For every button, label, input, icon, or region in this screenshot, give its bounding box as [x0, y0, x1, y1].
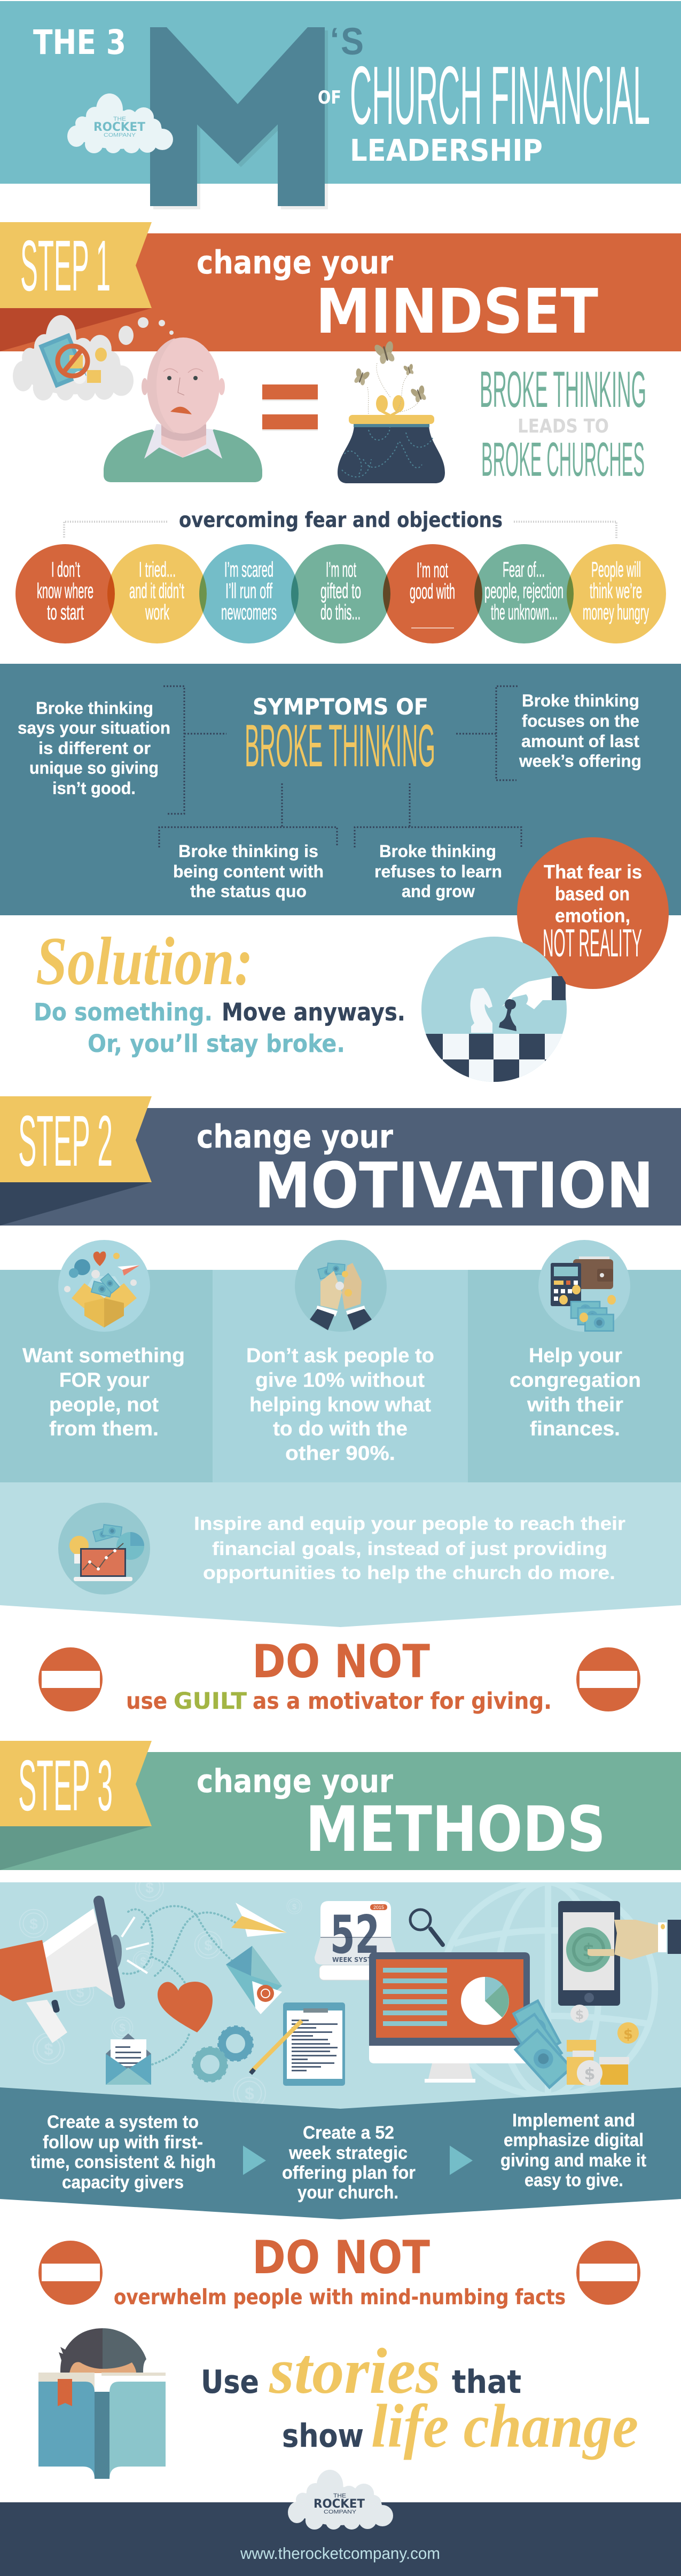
text: want something for your people: Want something [22, 1345, 185, 1367]
panel: inspire and equip [0, 1482, 681, 1627]
icon: cash and coins: $ [623, 2027, 633, 2043]
symptom: different or unique: is different or [38, 739, 151, 758]
title: apostrophe s: S [341, 21, 364, 63]
objection: not good with blank [410, 559, 455, 629]
objection: tried: work [145, 601, 170, 624]
objection: not gifted [320, 558, 361, 624]
logo: rocket company cloud [288, 2470, 393, 2530]
symptom: status quo: being content with [173, 862, 324, 881]
objection: fear of: people, rejection [484, 579, 563, 603]
text: follow up system [30, 2112, 216, 2193]
text: digital giving: easy to give. [525, 2170, 623, 2190]
text: use stories that show life change [201, 2335, 638, 2460]
callout: do not overwhelm [38, 2231, 640, 2310]
big letter M [150, 27, 328, 209]
text: follow up system: Create a system to [47, 2112, 199, 2132]
step 3 flag: STEP 3 [18, 1745, 113, 1826]
icon: man with worried face [104, 337, 262, 482]
objection: where to start: I don’t [51, 558, 80, 582]
icon: mail envelope [226, 1946, 282, 2014]
text: follow up system: follow up with first- [43, 2132, 203, 2153]
solution line one: Do something. [34, 998, 213, 1026]
text: inspire and equip: financial goals, instead of just providing [212, 1538, 607, 1559]
objection: tried [129, 558, 184, 624]
logo: rocket company cloud: ROCKET [93, 121, 145, 134]
text: digital giving [500, 2110, 646, 2190]
objection: fear of: Fear of... [503, 558, 545, 582]
text: inspire and equip: opportunities to help the church do more. [203, 1562, 615, 1583]
objection: not gifted: do this... [320, 601, 361, 624]
objection: fear of: the unknown... [491, 601, 558, 624]
text: 52 week plan: offering plan for [282, 2163, 416, 2183]
icon: 52 week calendar: WEEK SYSTEM [332, 1956, 382, 1964]
solution line one [34, 998, 405, 1026]
panel: symptoms of broke thinking [0, 664, 681, 915]
logo: rocket company cloud: ROCKET [314, 2498, 365, 2511]
callout: do not use guilt [38, 1635, 640, 1715]
objection: fear of [484, 558, 563, 624]
icon: 52 week calendar: 2015 [373, 1905, 384, 1910]
chart: overlapping objection circles: good with [410, 580, 455, 603]
objection: newcomers [221, 558, 277, 624]
text: broke thinking leads to broke churches [480, 361, 646, 486]
title: of: OF [318, 87, 341, 108]
arrow: two [450, 2146, 473, 2175]
heading: symptoms of: SYMPTOMS OF [253, 694, 428, 720]
text: help your congregation: finances. [530, 1418, 620, 1440]
text: use stories that show life change: show [282, 2417, 364, 2455]
icon: phone with hand [558, 1901, 681, 2006]
arrow: one [243, 2146, 266, 2175]
text: 52 week plan: week strategic [288, 2143, 408, 2163]
text: inspire and equip: Inspire and equip your people to reach their [194, 1513, 625, 1534]
background globe [441, 1882, 655, 2096]
guilt sentence [126, 1688, 552, 1715]
objection: newcomers: I’m scared [224, 558, 273, 582]
step 2 flag [0, 1096, 152, 1182]
icon: chess move [421, 937, 567, 1082]
icon: wallet and calculator [538, 1240, 630, 1332]
panel: header [0, 1, 681, 209]
icon: person reading book [38, 2328, 166, 2479]
text: inspire and equip [194, 1513, 625, 1583]
step 1 flag [0, 222, 152, 308]
symptom: last week's offering [519, 691, 641, 771]
icon: gears [193, 2027, 252, 2081]
text: 52 week plan: your church. [298, 2182, 398, 2203]
guilt sentence: as a motivator for giving. [253, 1688, 552, 1715]
symptom: different or unique: says your situation [18, 718, 170, 737]
title: apostrophe s [330, 21, 364, 63]
logo: rocket company cloud: COMPANY [104, 132, 136, 138]
panel: step 3 banner [0, 1741, 681, 1870]
symptom: different or unique: Broke thinking [36, 698, 153, 718]
icon: cash and coins [510, 1999, 639, 2090]
icon: magnifying glass [410, 1910, 443, 1945]
icon: computer monitor with report [369, 1952, 530, 2083]
heading: mindset: MINDSET [316, 276, 598, 348]
icon: hands with money [295, 1240, 387, 1332]
text: don't ask people to give 10%: give 10% without [255, 1369, 425, 1392]
icon: 52 week calendar [315, 1901, 397, 1980]
icon: cash and coins: $ [575, 2007, 584, 2022]
icon: equals sign [262, 384, 318, 431]
step 1 flag: STEP 1 [20, 225, 111, 306]
text: use stories that show life change: Use [201, 2363, 259, 2401]
objection: tried: and it didn’t [129, 579, 184, 603]
text: want something for your people: from them. [49, 1418, 159, 1440]
chart: overlapping objection circles: know where [37, 579, 93, 603]
objection: not good with blank: I’m not [417, 559, 448, 582]
symptom: refuses to learn: Broke thinking [379, 842, 496, 861]
icon: phone with hand: $ [582, 1940, 595, 1961]
text: don't ask people to give 10%: helping know what [249, 1394, 431, 1416]
text: don't ask people to give 10% [246, 1345, 434, 1465]
do not heading: DO NOT [252, 1635, 430, 1688]
objection: where to start: to start [47, 601, 84, 624]
symptom: status quo [173, 842, 324, 901]
do not heading: DO NOT [252, 2231, 430, 2284]
heading: change your: change your [197, 1763, 393, 1800]
overwhelm sentence: overwhelm people with mind-numbing facts [114, 2286, 566, 2310]
guilt sentence: use [126, 1688, 167, 1715]
icon: thought cloud with crossed out money [13, 315, 174, 400]
objection: where to start [37, 558, 93, 624]
panel: methods steps [0, 2087, 681, 2219]
callout: fear based on emotion: emotion, [555, 905, 630, 926]
icon: small envelope with letter [106, 2033, 151, 2085]
text: use stories that show life change: stories [269, 2335, 441, 2407]
icon: 52 week calendar: 52 [330, 1905, 380, 1966]
heading: change your: change your [197, 1118, 393, 1156]
logo: rocket company cloud: COMPANY [324, 2509, 356, 2515]
website url: www.therocketcompany.com [240, 2544, 440, 2563]
icon: paper plane [231, 1903, 287, 1937]
icon: cash and coins: $ [584, 2065, 595, 2084]
symptom: last week's offering: week’s offering [519, 751, 641, 771]
text: help your congregation: congregation [510, 1369, 641, 1392]
text: don't ask people to give 10%: to do with the [273, 1418, 408, 1440]
text: help your congregation: Help your [529, 1345, 622, 1367]
text: digital giving: Implement and [512, 2110, 635, 2131]
objection: tried: I tried... [139, 558, 176, 582]
objection: money hungry [583, 558, 649, 624]
symptom: last week's offering: Broke thinking [522, 691, 639, 710]
callout: fear based on emotion: That fear is [544, 861, 642, 883]
text: want something for your people: people, not [49, 1394, 159, 1416]
text: digital giving: emphasize digital [504, 2130, 644, 2150]
text: help your congregation: with their [527, 1394, 623, 1416]
background coins [20, 1873, 302, 2109]
icon: laptop and bulb [58, 1503, 150, 1595]
icon: no entry right [576, 1647, 640, 1711]
panel: motivation columns [0, 1240, 681, 1482]
text: help your congregation [510, 1345, 641, 1440]
heading: change your: change your [197, 244, 393, 281]
icon: purse with moths [338, 339, 445, 483]
symptom: last week's offering: focuses on the [522, 711, 639, 731]
icon: no entry left [38, 2241, 103, 2305]
objection: not gifted: I’m not [326, 558, 356, 582]
text: follow up system: capacity givers [62, 2172, 184, 2193]
icon: gift box [58, 1240, 150, 1332]
icon: clipboard with pencil [251, 2002, 345, 2086]
objection: newcomers: newcomers [221, 601, 277, 624]
logo: rocket company cloud: THE [333, 2493, 346, 2499]
solution script heading: Solution: [36, 923, 253, 999]
symptom: different or unique: isn’t good. [52, 779, 136, 798]
text: use stories that show life change: that [452, 2363, 521, 2401]
text: follow up system: time, consistent & high [30, 2152, 216, 2172]
text: broke thinking leads to broke churches: LEADS TO [518, 415, 609, 437]
callout: fear based on emotion: based on [555, 883, 630, 905]
guilt sentence: GUILT [174, 1688, 247, 1715]
text: digital giving: giving and make it [500, 2150, 646, 2171]
symptom: status quo: Broke thinking is [178, 842, 318, 861]
objection: newcomers: I’ll run off [225, 579, 272, 603]
symptom: refuses to learn [374, 842, 502, 901]
text: use stories that show life change: life change [371, 2392, 638, 2460]
panel: step 2 banner [0, 1096, 681, 1226]
solution line two: Or, you’ll stay broke. [88, 1030, 345, 1058]
objection: not gifted: gifted to [320, 579, 361, 603]
panel: methods illustration [0, 1873, 681, 2117]
symptom: different or unique: unique so giving [29, 758, 159, 777]
symptom: last week's offering: amount of last [521, 732, 639, 751]
symptom: refuses to learn: and grow [402, 882, 475, 901]
icon: heart [158, 1982, 213, 2032]
heading: overcoming fear and objections: overcoming fear and objections [179, 508, 503, 532]
text: want something for your people: FOR your [59, 1369, 150, 1392]
symptom: different or unique [18, 698, 170, 798]
logo: rocket company cloud: THE [113, 116, 126, 122]
title: the 3: THE 3 [33, 23, 126, 62]
title: leadership: LEADERSHIP [350, 133, 543, 168]
icon: megaphone [0, 1901, 149, 2043]
heading: methods: METHODS [306, 1793, 606, 1866]
heading: overcoming fear and objections [64, 508, 616, 538]
icon: no entry right [576, 2241, 640, 2305]
solution line one: Move anyways. [222, 998, 405, 1026]
text: 52 week plan [282, 2123, 416, 2203]
symptom: refuses to learn: refuses to learn [374, 862, 502, 881]
text: don't ask people to give 10%: other 90%. [285, 1442, 395, 1465]
text: want something for your people [22, 1345, 185, 1440]
step 2 flag: STEP 2 [18, 1101, 113, 1181]
panel: footer [0, 2470, 681, 2576]
title: apostrophe s: ‘ [330, 21, 339, 57]
symptom: status quo: the status quo [190, 882, 307, 901]
text: solution [34, 923, 405, 1058]
callout: fear based on emotion [517, 837, 669, 989]
text: 52 week plan: Create a 52 [303, 2123, 394, 2143]
panel: step 1 banner [0, 222, 681, 351]
icon: no entry left [38, 1647, 103, 1711]
chart: overlapping objection circles [15, 544, 666, 643]
logo: rocket company cloud [67, 93, 173, 153]
step 3 flag [0, 1741, 152, 1826]
dotted flight paths [122, 1906, 238, 2064]
text: don't ask people to give 10%: Don’t ask people to [246, 1345, 434, 1367]
